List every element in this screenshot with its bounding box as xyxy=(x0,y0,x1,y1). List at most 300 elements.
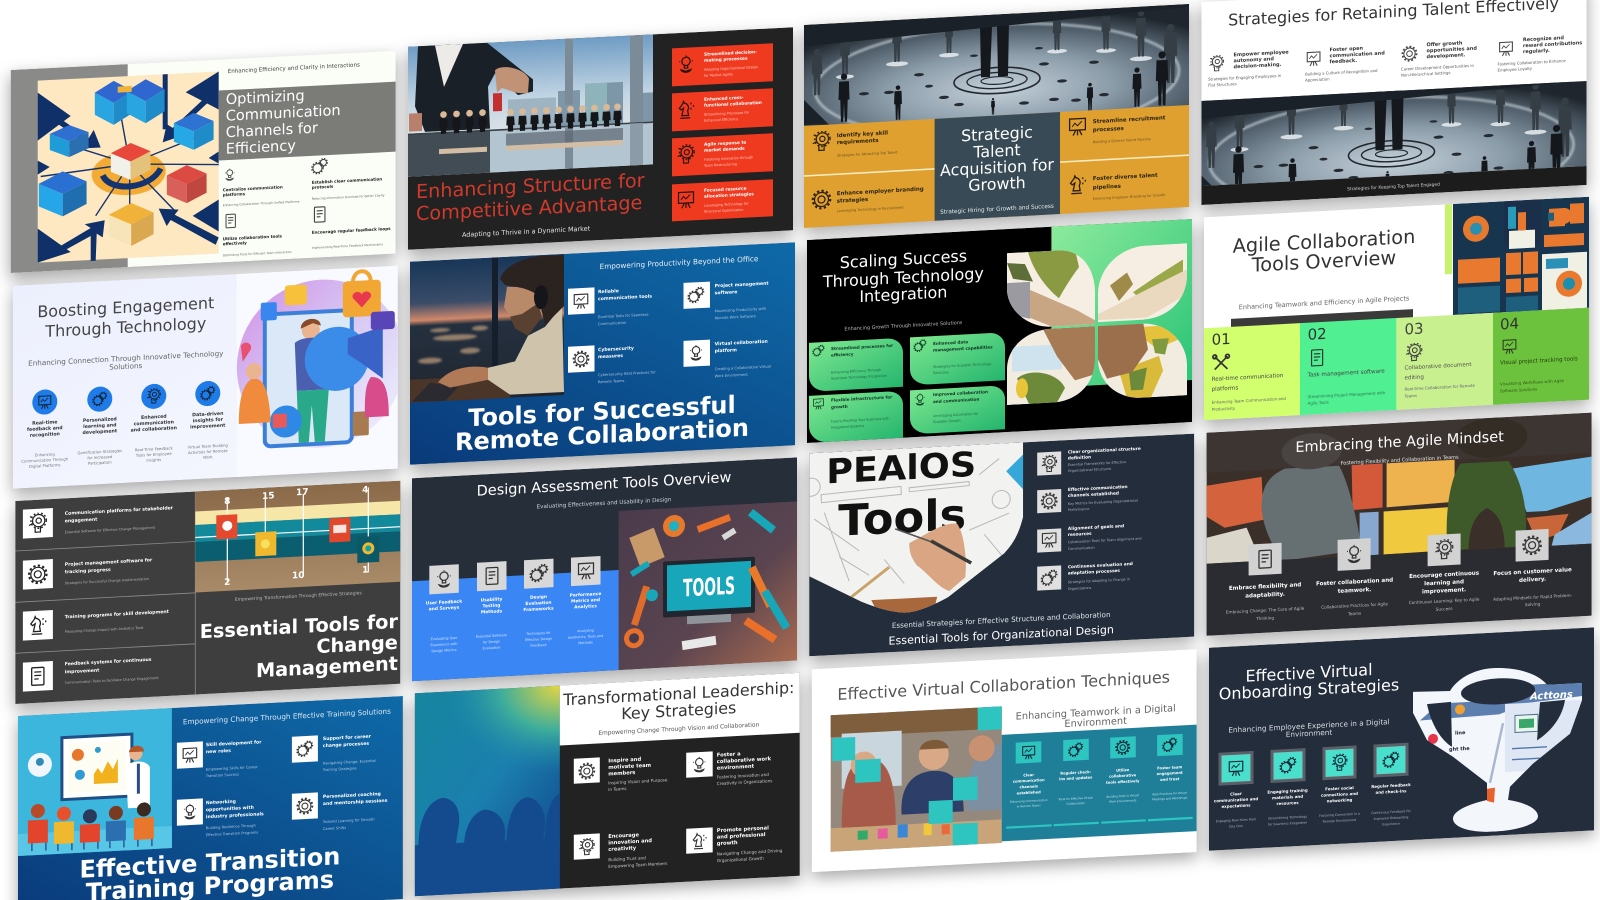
item: real-time feedback: Communication Through xyxy=(21,456,69,464)
image: timeline on wood: 15 xyxy=(262,491,275,502)
item: engaging materials: Engaging training xyxy=(1267,787,1308,795)
item: structure definition: Organizational Structures xyxy=(1068,467,1111,473)
subtitle: Empowering Change Through Effective Training Solutions xyxy=(183,707,391,726)
item: enhanced communication: and collaboration xyxy=(131,425,177,434)
chip: data management xyxy=(910,332,1005,385)
column 03: Collaborative document xyxy=(1404,362,1472,372)
item: communication tools: Reliable xyxy=(598,288,619,295)
column 03: editing xyxy=(1404,375,1424,382)
item: performance metrics: Metrics and xyxy=(571,597,600,605)
illustration: training presenter and audience xyxy=(18,708,172,856)
column 03: Teams xyxy=(1404,393,1417,399)
item: training programs: Training programs for skill development xyxy=(65,609,170,620)
title: Effective Virtual Collaboration Techniques xyxy=(837,667,1170,704)
chip: flexible infrastructure: growth xyxy=(831,404,848,410)
trophy-shaped image: Acttons xyxy=(1529,689,1573,703)
item: collaboration: Teams xyxy=(1347,611,1361,616)
item: customer value: Solving xyxy=(1525,601,1541,607)
title: Integration xyxy=(859,282,947,306)
box: decision-making xyxy=(672,43,773,86)
item: establish protocols: protocols xyxy=(312,184,334,190)
item: recognize contributions xyxy=(1498,34,1582,73)
slide card: Agile Collaboration Tools xyxy=(1204,197,1589,420)
box: decision-making: Adapting Organizational Design xyxy=(704,65,758,72)
item: enhanced communication: communication xyxy=(134,419,174,427)
item: key skill requirements xyxy=(813,127,898,159)
subtitle: Enhancing Efficiency and Clarity in Interactions xyxy=(228,62,360,75)
item: personalized learning: development xyxy=(83,428,118,436)
column 04: 04 xyxy=(1500,314,1519,333)
slide card: Effective Virtual Collaboration xyxy=(812,649,1197,872)
item: real-time feedback: Enhancing xyxy=(35,451,55,458)
teal panel xyxy=(1002,725,1197,841)
trophy-shaped image: line xyxy=(1455,730,1466,737)
item: growth opportunities: Non-Hierarchical Settings xyxy=(1401,70,1451,78)
item: streamline recruitment: processes xyxy=(1093,126,1124,134)
title: Effective Virtual xyxy=(1245,660,1373,686)
item: inspire team: motivate team xyxy=(608,763,651,771)
item: diverse pipelines: Foster diverse talent xyxy=(1093,173,1158,182)
item: user feedback: User Feedback xyxy=(426,599,462,607)
subtitle: Empowering Transformation Through Effective Strategies xyxy=(235,590,362,603)
item: design evaluation: Feedback xyxy=(530,643,547,648)
item: user feedback: and Surveys xyxy=(429,605,460,612)
item: continuous evaluation: adaptation processes xyxy=(1068,568,1120,577)
box: decision-making: for Market Agility xyxy=(704,72,733,78)
item: data-driven insights: Virtual Team Building xyxy=(188,442,229,450)
column 04: Software Solutions xyxy=(1500,386,1537,393)
item: training programs: Measuring Change Impact with Analytics Tools xyxy=(65,626,144,634)
item: centralize platforms xyxy=(222,168,300,206)
item: personalized learning: Participation xyxy=(88,460,112,466)
item: project management: Maximizing Productivity with xyxy=(715,307,766,313)
title: Onboarding Strategies xyxy=(1219,675,1399,704)
subtitle: Environment xyxy=(1286,728,1332,739)
item: empower employees: Flat Structures xyxy=(1208,81,1237,88)
item: stakeholder platforms xyxy=(22,506,173,539)
subtitle: Solutions xyxy=(109,361,143,372)
image: timeline on wood: 2 xyxy=(224,578,230,588)
box: decision-making: making processes xyxy=(704,56,748,64)
item: coaching: Personalized coaching xyxy=(323,791,381,800)
item: recognize contributions: regularly. xyxy=(1523,48,1550,55)
item: personal growth: Organizational Growth xyxy=(717,856,764,863)
item: engaging materials xyxy=(1267,749,1308,827)
item: collaborative tools: tools effectively xyxy=(1106,779,1140,785)
slide card: Embracing the Agile Mindset xyxy=(1207,413,1592,636)
chip: improved collaboration: and communication xyxy=(933,397,979,404)
title: Change xyxy=(316,631,398,658)
title band: Channels for xyxy=(226,120,318,141)
column 03: Real-time Collaboration for Remote xyxy=(1404,383,1475,392)
item: virtual platform: platform xyxy=(715,347,737,354)
item: coaching: Tailored Learning for Smooth xyxy=(322,817,375,824)
item: data-driven insights: improvement xyxy=(190,423,226,430)
chip: improved collaboration: Leveraging Automation for xyxy=(933,412,979,418)
subtitle: Enhancing Teamwork and Efficiency in Agile Projects xyxy=(1239,294,1410,311)
item: performance metrics: Analyzing xyxy=(577,628,594,633)
item: clear channels xyxy=(1010,741,1048,809)
item: encourage innovation: Encourage xyxy=(608,832,640,840)
item: social connections xyxy=(1319,747,1360,824)
item: real-time feedback: feedback and xyxy=(27,425,63,433)
item: data-driven insights: Data-driven xyxy=(192,411,223,418)
box: agile response: Agile response to xyxy=(704,140,746,148)
item: employer branding xyxy=(813,185,924,215)
box: agile response: Fostering Innovation through xyxy=(704,155,753,162)
item: career change support xyxy=(292,732,376,774)
item: project management: Project management software for xyxy=(65,557,153,568)
item: personalized learning: Gamification Strategies xyxy=(77,448,122,455)
slide card: Tools for Remote Collaboration xyxy=(410,242,795,465)
item: social connections: Foster social xyxy=(1325,785,1354,792)
box: resource allocation: Structural Optimization xyxy=(704,208,744,214)
item: collaboration tools: effectively xyxy=(223,240,247,246)
item: career change support: change processes xyxy=(323,741,369,749)
slide card: Essential Tools for Change Management xyxy=(15,481,400,704)
item: cybersecurity xyxy=(568,345,656,384)
photo: people on circular platform xyxy=(794,0,1204,148)
item: collaborative environment: collaborative work xyxy=(717,756,772,765)
image: tools and monitor xyxy=(619,501,797,670)
item: real-time feedback: Real-time xyxy=(32,419,58,427)
item: career change support: Training Strategies xyxy=(322,766,357,772)
item: clear communication: expectations xyxy=(1221,802,1251,809)
item: project management: software xyxy=(715,289,737,296)
item: stakeholder platforms: Essential Software for Effective Change Management xyxy=(65,526,156,534)
image: handshake world map petals xyxy=(1002,239,1192,409)
item: data-driven insights: insights for xyxy=(193,417,224,424)
item: feedback systems: improvement xyxy=(65,668,100,675)
chip: flexible infrastructure: Future-Proofing Your Business with xyxy=(831,417,889,424)
item: collaboration tools: Utilize collaboration tools xyxy=(223,233,283,241)
item: team engagement: Foster team xyxy=(1157,765,1182,771)
item: virtual platform: Creating a Collaborative Virtual xyxy=(715,365,771,371)
slide card: Retaining Talent xyxy=(1188,0,1598,220)
item: alignment of goals: Collaboration Tools for Team Alignment and xyxy=(1068,537,1142,544)
item: regular check-ins xyxy=(1057,739,1093,806)
trophy-shaped image xyxy=(1409,658,1585,839)
item: coaching: Career Shifts xyxy=(323,826,346,831)
title: Remote Collaboration xyxy=(455,414,749,456)
title: Competitive Advantage xyxy=(416,191,642,225)
slide card: Optimizing Communication Channels xyxy=(11,51,396,273)
column 01: Productivity xyxy=(1212,406,1236,412)
box: resource allocation: allocation strategies xyxy=(704,191,754,200)
slide card: Effective Transition Training xyxy=(18,696,403,900)
image: hand drawing tools sketch: PEAlOS xyxy=(826,445,976,492)
item: communication channels: channels established xyxy=(1068,490,1119,499)
subtitle: Environment xyxy=(1064,716,1127,730)
item: encourage innovation xyxy=(574,830,667,871)
box: decision-making: Streamlined decision- xyxy=(704,49,757,58)
item: coaching xyxy=(292,789,388,833)
chip: data management: Enhanced data xyxy=(933,339,968,346)
title: Agile Collaboration xyxy=(1233,225,1415,258)
item: establish protocols: Establish clear communication xyxy=(312,176,382,185)
image: hand drawing tools sketch xyxy=(802,442,1023,624)
slide card: Design Assessment Tools xyxy=(412,457,797,681)
item: continuous evaluation: Continuous evaluation and xyxy=(1068,561,1133,570)
illustration: phone and people xyxy=(237,269,405,452)
illustration: isometric packages network xyxy=(38,72,219,264)
item: open communication: communication and xyxy=(1330,50,1385,59)
column 01 xyxy=(1204,323,1300,420)
image: timeline on wood: 4 xyxy=(362,485,368,496)
item: communication channels: Key Metrics for Evaluating Organizational xyxy=(1068,498,1138,506)
chip: data management: Strategies for Scalable Technology xyxy=(933,362,991,369)
title panel: Strategic Hiring for Growth and Success xyxy=(940,204,1054,216)
item: social connections: Fostering Connection in a xyxy=(1319,812,1360,818)
item: flexibility: Embracing Change: The Core of Agile xyxy=(1226,606,1305,615)
item: team engagement xyxy=(1152,734,1188,801)
photo: team around table xyxy=(831,706,1002,852)
title band: Communication xyxy=(226,102,341,125)
item: clear channels: communication xyxy=(1013,778,1045,784)
item: regular feedback: Regular feedback xyxy=(1371,782,1411,789)
item: encourage innovation: innovation and xyxy=(608,838,652,846)
subtitle: Fostering Flexibility and Collaboration in Teams xyxy=(1341,455,1459,467)
item: open communication: Appreciation xyxy=(1305,76,1330,83)
chip: streamlined processes: Seamless Technology Integration xyxy=(831,374,887,381)
title panel xyxy=(560,673,800,746)
item: continuous learning: Encourage continuous xyxy=(1409,570,1480,580)
item: personal growth: and professional xyxy=(717,832,766,841)
item: engaging materials: for Seamless Integration xyxy=(1268,821,1307,827)
item: personalized learning: learning and xyxy=(83,422,116,430)
item: usability testing: Usability xyxy=(481,596,503,604)
slide card: Scaling Success xyxy=(807,219,1192,443)
subtitle: Enhancing Employee Experience in a Digital xyxy=(1228,717,1390,735)
title xyxy=(822,245,984,308)
item: encourage innovation: Building Trust and xyxy=(608,855,646,862)
item: continuous evaluation: Strategies for Adapting to Change in xyxy=(1068,577,1130,584)
item: user feedback: Design Metrics xyxy=(431,648,457,653)
item: regular feedback: Improved Onboarding xyxy=(1374,815,1408,821)
item: career change support: Support for career xyxy=(323,734,372,742)
column 03 xyxy=(1396,313,1493,410)
title band: Optimizing xyxy=(226,87,305,108)
item: continuous learning: improvement. xyxy=(1422,587,1466,595)
item: personalized learning: Personalized xyxy=(83,416,117,424)
item: collaboration: Collaborative Practices for Agile xyxy=(1321,601,1388,610)
item: empower employees: Strategies for Engaging Employees in xyxy=(1208,73,1282,82)
column 01: Enhancing Team Communication and xyxy=(1212,396,1286,405)
item: communication tools: communication tools xyxy=(598,293,652,302)
item: regular check-ins: Regular check- xyxy=(1060,770,1092,776)
title panel: Talent xyxy=(972,140,1021,162)
item: recognize contributions: Fostering Collaboration to Enhance xyxy=(1498,58,1566,67)
item: structure definition: Essential Frameworks for Effective xyxy=(1068,460,1126,467)
box: resource allocation: Focused resource xyxy=(704,186,747,194)
item: structure definition xyxy=(1037,446,1141,476)
item: alignment of goals: Communication xyxy=(1068,546,1095,551)
item: flexibility xyxy=(1226,542,1305,623)
image: timeline on wood: 1 xyxy=(362,565,368,576)
item: key skill requirements: Strategies for Attracting Top Talent xyxy=(837,150,898,158)
item: performance metrics xyxy=(568,556,603,646)
column 04: Visualizing Workflows with Agile xyxy=(1500,378,1565,386)
title panel: Growth xyxy=(968,173,1026,195)
trophy-shaped image: ght the xyxy=(1449,746,1470,753)
item: real-time feedback: recognition xyxy=(30,431,60,439)
item: performance metrics: Methods xyxy=(578,640,593,645)
item: continuous learning xyxy=(1409,532,1480,613)
item: enhanced communication: Insights xyxy=(146,457,161,463)
item: usability testing xyxy=(476,561,507,651)
title panel: Acquisition for xyxy=(940,155,1054,180)
item: usability testing: Essential Software xyxy=(476,633,507,639)
image: timeline on wood: 17 xyxy=(296,488,309,498)
item: centralize platforms: platforms xyxy=(223,191,246,197)
item: clear communication: communication and xyxy=(1214,796,1258,803)
item: project management xyxy=(22,558,152,590)
item: structure definition: definition xyxy=(1068,454,1091,462)
column 04: Visual project tracking tools xyxy=(1500,356,1578,366)
item: collaboration: teamwork. xyxy=(1338,587,1371,595)
item: inspire team xyxy=(574,754,668,794)
item: feedback systems: Feedback systems for continuous xyxy=(65,657,152,667)
title: Scaling Success xyxy=(840,246,967,272)
item: flexibility: adaptability. xyxy=(1245,592,1285,600)
item: usability testing: Testing xyxy=(483,602,500,609)
box: cross-functional: Enhanced cross- xyxy=(704,95,744,103)
item: cybersecurity: Cybersecurity xyxy=(598,345,634,353)
item: networking: Building Resilience Through xyxy=(206,824,256,830)
image: tools and monitor: TOOLS xyxy=(683,572,735,603)
item: personalized learning xyxy=(77,386,122,466)
item: feedback loops: Implementing Real-Time Feedback Mechanisms xyxy=(312,242,383,250)
item: stakeholder platforms: engagement xyxy=(65,517,98,524)
column 02: 02 xyxy=(1308,325,1327,344)
item: communication tools xyxy=(568,287,652,326)
image: timeline on wood: 8 xyxy=(224,497,230,507)
item: engaging materials: resources xyxy=(1277,800,1299,806)
item: clear channels: Clear xyxy=(1023,773,1034,778)
title panel xyxy=(935,112,1060,221)
item: recognize contributions: Employee Loyalty xyxy=(1498,66,1533,73)
item: diverse pipelines xyxy=(1070,171,1165,202)
item: customer value xyxy=(1493,528,1573,609)
title: Essential Tools for xyxy=(200,610,398,643)
title: Through Technology xyxy=(822,264,984,291)
item: centralize platforms: Centralize communication xyxy=(223,184,283,192)
item: regular feedback: and check-ins xyxy=(1375,788,1407,795)
item: stakeholder platforms: Communication platforms for stakeholder xyxy=(65,505,174,517)
item: project management: tracking progress xyxy=(65,567,111,575)
item: clear channels: channels xyxy=(1019,784,1039,789)
item: regular feedback: Continuous Feedback for xyxy=(1371,809,1411,815)
item: communication channels: Performance xyxy=(1068,507,1089,512)
item: enhanced communication: Enhanced xyxy=(141,414,167,421)
box: resource allocation xyxy=(672,179,773,221)
item: feedback systems: Communication Tools to Facilitate Change Engagement xyxy=(65,676,159,685)
item: skill development: Transition Success xyxy=(205,773,239,778)
chip: streamlined processes: Enhancing Efficiency Through xyxy=(831,368,881,375)
item: design evaluation: Design xyxy=(530,594,547,601)
column 02: Agile Tools xyxy=(1308,400,1329,406)
photo: figures and sticky notes xyxy=(1207,413,1592,636)
title: Management xyxy=(256,652,398,682)
item: team engagement: Best Practices for Virtual xyxy=(1152,791,1187,796)
item: communication tools: Essential Tools for Seamless xyxy=(598,313,649,319)
item: regular check-ins: Tools for Effective Virtual xyxy=(1057,796,1093,801)
subtitle: Adapting to Thrive in a Dynamic Market xyxy=(462,225,591,239)
item: alignment of goals: Alignment of goals and xyxy=(1068,523,1124,532)
item: personalized learning: for Increased xyxy=(87,454,113,460)
title band: Efficiency xyxy=(226,137,296,158)
item: communication tools: Communication xyxy=(598,321,626,326)
chip: data management: management capabilities xyxy=(933,344,993,353)
item: clear communication: Clear xyxy=(1230,791,1242,797)
slide card: Boosting Engagement xyxy=(13,265,405,489)
item: project management: Strategies for Successful Change Implementation xyxy=(65,577,149,585)
item: streamline recruitment xyxy=(1070,114,1166,146)
box: cross-functional: functional collaboration xyxy=(704,100,762,109)
item: team engagement: and trust xyxy=(1160,777,1180,782)
item: performance metrics: Performance xyxy=(570,591,601,599)
item: clear channels: in Remote Teams xyxy=(1017,803,1041,809)
subtitle: Enhancing Teamwork in a Digital xyxy=(1016,703,1176,723)
column 01: platforms xyxy=(1212,385,1238,393)
item: inspire team: Inspiring Vision and Purpose xyxy=(608,777,668,785)
item: enhanced communication xyxy=(131,383,177,464)
box: cross-functional xyxy=(672,88,773,131)
slide card: Effective Virtual Onboarding xyxy=(1209,627,1594,851)
item: personal growth: Navigating Change and Driving xyxy=(717,848,783,856)
item: engaging materials: Streamlining Technology xyxy=(1268,815,1307,821)
chip: improved collaboration: Scalable Growth xyxy=(933,419,961,424)
item: growth opportunities: Career Development Opportunities in xyxy=(1401,63,1474,72)
item: empower employees: Empower employee xyxy=(1234,49,1289,58)
item: empower employees: decision-making. xyxy=(1234,62,1282,70)
item: design evaluation xyxy=(523,559,554,648)
column 02 xyxy=(1300,318,1396,415)
title: Tools for Successful xyxy=(468,391,736,432)
item: networking: industry professionals xyxy=(206,811,264,820)
slide card: Essential Tools for Organizational Design xyxy=(802,434,1194,657)
box: agile response: Team Restructuring xyxy=(703,162,737,168)
item: feedback systems xyxy=(23,655,159,692)
chip: flexible infrastructure: Integrated Systems xyxy=(831,424,864,430)
chip: improved collaboration xyxy=(910,385,1005,434)
box: agile response xyxy=(672,133,773,176)
title: Through Technology xyxy=(44,314,206,341)
item: user feedback xyxy=(426,564,462,654)
item: social connections: connections and xyxy=(1321,791,1358,798)
item: enhanced communication: Real-Time Feedback xyxy=(135,445,173,452)
box: cross-functional: Streamlining Processes for xyxy=(704,110,750,117)
item: growth opportunities: opportunities and xyxy=(1426,46,1477,54)
item: customer value: delivery. xyxy=(1519,577,1546,584)
item: collaboration tools: Optimizing Tools for Efficient Team Interaction xyxy=(223,250,292,257)
item: coaching: and mentorship sessions xyxy=(323,798,388,807)
item: design evaluation: Frameworks xyxy=(523,606,554,613)
item: virtual platform: Work Environment xyxy=(715,373,748,378)
item: networking: Networking xyxy=(206,799,236,806)
item: cybersecurity: Cybersecurity Best Practices for xyxy=(598,370,656,377)
item: enhanced communication: Tools for Employee xyxy=(135,451,172,458)
image: infographic tile mosaic xyxy=(1453,197,1589,315)
title: Enhancing Structure for xyxy=(416,169,645,203)
item: networking xyxy=(177,795,264,839)
item: centralize platforms: Enhancing Collaboration Through Unified Platforms xyxy=(223,199,300,207)
item: employer branding: Enhance employer branding xyxy=(837,186,924,197)
item: data-driven insights: Work xyxy=(203,454,213,460)
title xyxy=(417,173,644,222)
item: social connections: Remote Environment xyxy=(1323,818,1357,824)
item: usability testing: for Design xyxy=(483,639,500,644)
